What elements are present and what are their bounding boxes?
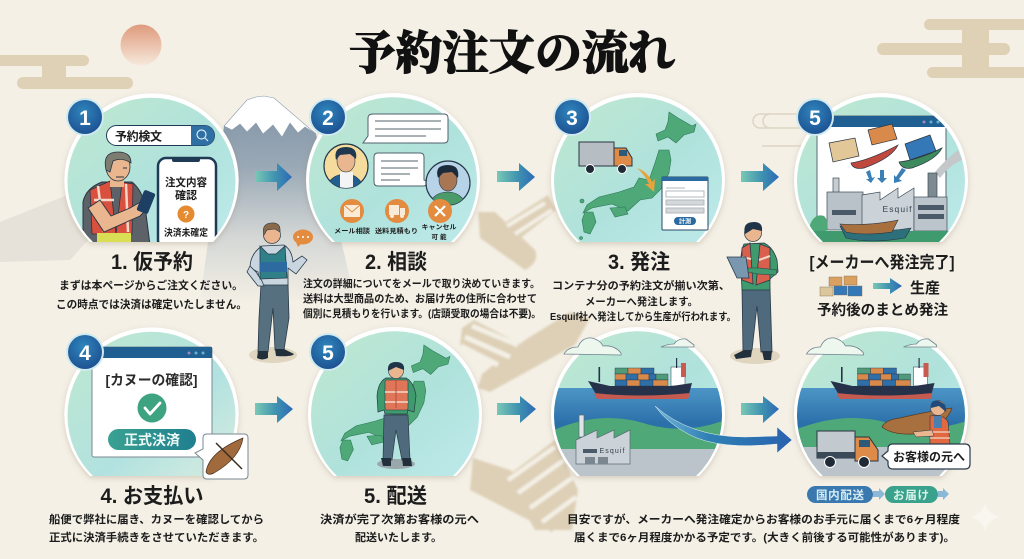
body text 4 xyxy=(49,512,264,544)
body text 3: メーカーへ発注します。 xyxy=(585,295,698,308)
icon labels: メール相談 xyxy=(334,226,371,235)
standing man with life vest xyxy=(377,362,416,469)
body text 3 xyxy=(550,279,736,323)
dome 5 lower xyxy=(308,327,482,476)
icon: truck small xyxy=(385,199,409,223)
dome 2 xyxy=(306,93,480,242)
person carrying canoe xyxy=(882,400,952,445)
panel: sea freight xyxy=(550,327,730,479)
dome 6 xyxy=(551,327,725,476)
arrow to last panel xyxy=(741,396,779,423)
icon labels: キャンセル xyxy=(422,223,457,231)
formal payment button: 正式決済 xyxy=(124,432,180,448)
curved arrow from ship to customer xyxy=(655,406,792,453)
search box xyxy=(106,126,214,146)
crates and canoes xyxy=(829,124,942,168)
small arrow end xyxy=(938,488,949,500)
smartphone: ? xyxy=(183,210,189,221)
japan map large xyxy=(340,345,450,461)
sea and land xyxy=(550,388,730,479)
person with phone xyxy=(83,152,156,245)
badge 4 xyxy=(66,333,104,371)
canoe bubble xyxy=(195,434,248,479)
small right-side wind lines xyxy=(753,114,806,146)
search box: 予約検文 xyxy=(115,128,162,144)
tan ladder pattern xyxy=(460,195,590,532)
left clouds xyxy=(0,55,133,89)
production label: 生産 xyxy=(910,279,940,297)
badge 5 top xyxy=(796,98,834,136)
badge 4: 4 xyxy=(79,342,91,365)
smartphone: 注文内容 xyxy=(165,175,207,189)
arrow to ship panel xyxy=(497,396,536,423)
heading 1: 1. 仮予約 xyxy=(111,251,193,274)
factory by the sea xyxy=(576,415,630,464)
dome 5 fill xyxy=(797,97,965,242)
japan map xyxy=(580,112,696,240)
body text schedule xyxy=(567,512,960,544)
arrow 3 to 5 xyxy=(741,163,779,191)
factory window scene xyxy=(808,116,962,246)
clouds xyxy=(564,338,694,355)
body text schedule: 目安ですが、メーカーへ発注確定からお客様のお手元に届くまで6ヶ月程度 xyxy=(567,512,960,526)
body text 5 delivery: 決済が完了次第お客様の元へ xyxy=(320,512,479,526)
arrow 1 to 2 xyxy=(255,163,292,191)
icon: cancel xyxy=(428,199,452,223)
body text 1 xyxy=(56,278,247,311)
arrow 2 to 3 xyxy=(497,163,535,191)
panel: step 1 xyxy=(56,93,247,311)
panel: step 2 xyxy=(303,93,541,320)
truck xyxy=(579,142,632,174)
badge 2: 2 xyxy=(322,107,334,130)
body text 4: 船便で弊社に届き、カヌーを確認してから xyxy=(49,512,264,526)
dome 4 fill xyxy=(68,332,236,476)
body text 2 xyxy=(303,277,541,320)
icon: mail xyxy=(340,199,364,223)
smartphone xyxy=(158,157,216,248)
body text schedule: 届くまで6ヶ月程度かかる予定です。(大きく前後する可能性があります)。 xyxy=(574,530,955,544)
window heading: [カヌーの確認] xyxy=(106,372,198,388)
formal payment button xyxy=(108,429,196,450)
body text 2: 注文の詳細についてをメールで取り決めていきます。 xyxy=(303,277,540,290)
dome 2 fill xyxy=(309,97,477,242)
body text 5 delivery: 配送いたします。 xyxy=(355,530,442,544)
panel: step 3 xyxy=(550,93,736,323)
dome 6 fill xyxy=(554,331,722,476)
heading maker order: [メーカーへ発注完了] xyxy=(810,253,954,272)
smartphone: 確認 xyxy=(175,188,197,202)
icon labels xyxy=(334,223,457,241)
panel: step 4 xyxy=(49,327,264,544)
form window: 計測 xyxy=(679,218,691,226)
window xyxy=(92,347,212,457)
badge 3 xyxy=(553,98,591,136)
pill: delivered: お届け xyxy=(893,489,929,502)
container ship 7 xyxy=(830,358,934,399)
pill: domestic delivery xyxy=(807,486,873,503)
form window xyxy=(662,177,708,230)
heading 5 delivery: 5. 配送 xyxy=(364,485,427,508)
dome 1 fill xyxy=(68,98,236,242)
right clouds xyxy=(877,19,1024,78)
avatar left xyxy=(324,144,368,192)
body text 5 delivery xyxy=(320,512,479,544)
heading 4: 4. お支払い xyxy=(100,485,204,508)
body text 1: まずは本ページからご注文ください。 xyxy=(59,278,243,292)
badge 1: 1 xyxy=(79,107,91,130)
delivery truck xyxy=(817,431,878,468)
title: 予約注文の流れ xyxy=(349,28,675,79)
body text 4: 正式に決済手続きをさせていただきます。 xyxy=(49,530,264,544)
dome 5 xyxy=(794,93,968,242)
figure: man with speech bubble xyxy=(247,223,313,363)
badge 2 xyxy=(309,98,347,136)
icon: check xyxy=(138,394,166,422)
dome 3 xyxy=(551,93,725,242)
container ship xyxy=(588,358,692,399)
delivery step pills xyxy=(807,486,949,503)
mountain fuji xyxy=(0,96,355,300)
figure: man with tablet xyxy=(727,222,780,364)
caption bulk order: 予約後のまとめ発注 xyxy=(817,301,949,319)
customer bubble xyxy=(882,444,970,469)
body text 3: Esquif社へ発注してから生産が行われます。 xyxy=(550,310,736,323)
down arrows to factory xyxy=(866,168,906,183)
speech bubble top xyxy=(363,114,448,143)
icon labels: 送料見積もり xyxy=(375,226,418,235)
badge 5 lower xyxy=(309,333,347,371)
panel: delivery to customer xyxy=(790,327,975,477)
badge 5 top: 5 xyxy=(809,107,821,130)
avatar right xyxy=(426,161,470,208)
dome 7 fill xyxy=(797,331,965,476)
panel: step 5 top (maker) xyxy=(794,93,968,319)
heading 2: 2. 相談 xyxy=(365,251,427,274)
arrow 4 to 5 xyxy=(255,396,293,423)
sea and land 7 xyxy=(797,388,965,476)
dome 3 fill xyxy=(554,97,722,242)
dome 4 xyxy=(64,327,239,476)
arrow to production xyxy=(873,278,902,294)
clouds 7 xyxy=(806,338,936,355)
body text 2: 個別に見積もりを行います。(店頭受取の場合は不要)。 xyxy=(303,307,541,320)
dome 7 xyxy=(794,327,968,476)
pill: delivered xyxy=(885,486,938,503)
factory by the sea: Esquif xyxy=(600,448,625,455)
small arrow xyxy=(873,488,885,500)
icon labels: 可能 xyxy=(432,232,447,241)
heading 3: 3. 発注 xyxy=(608,251,670,274)
factory name: Esquif xyxy=(882,204,912,214)
badge 3: 3 xyxy=(566,107,578,130)
body text 2: 送料は大型商品のため、お届け先の住所に合わせて xyxy=(303,292,537,305)
dome 1 xyxy=(64,93,239,242)
body text 1: この時点では決済は確定いたしません。 xyxy=(56,297,247,311)
badge 1 xyxy=(66,98,104,136)
smartphone: 決済未確定 xyxy=(164,227,208,239)
body text 3: コンテナ分の予約注文が揃い次第、 xyxy=(552,279,730,292)
icon: sparkle xyxy=(970,502,1000,532)
dome 5 lower fill xyxy=(311,331,479,476)
speech bubble middle xyxy=(374,153,432,186)
panel: step 5 delivery xyxy=(308,327,482,544)
customer bubble: お客様の元へ xyxy=(893,449,965,464)
icon: stacked boxes xyxy=(820,276,862,296)
sun xyxy=(120,24,162,66)
pill: domestic delivery: 国内配送 xyxy=(816,488,864,502)
orange arrow on map xyxy=(637,168,655,192)
badge 5 lower: 5 xyxy=(322,342,334,365)
